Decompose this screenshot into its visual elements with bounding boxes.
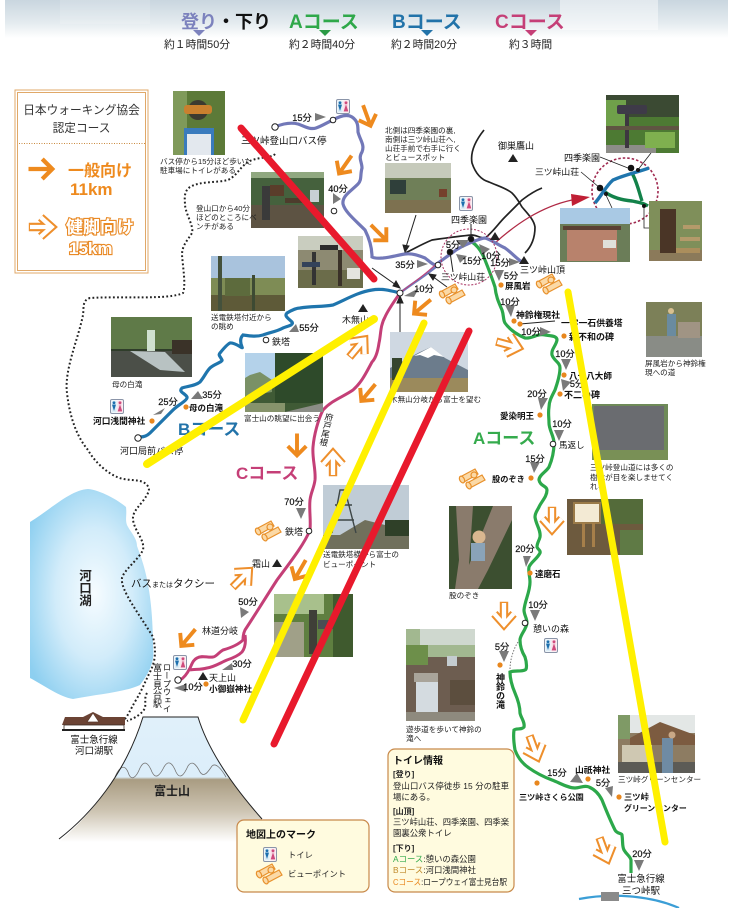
toilet information panel: 園裏公衆トイレ xyxy=(393,828,452,838)
place labels: 三ツ峠登山口バス停 xyxy=(241,135,327,147)
photo: signpost with hedge xyxy=(606,95,679,153)
route: Bコース (blue) xyxy=(140,289,400,437)
orange point dots xyxy=(149,282,622,800)
heading: Bコース: Bコース xyxy=(392,12,462,33)
inset: summit detail map xyxy=(581,153,658,228)
photo captions: 遊歩道を歩いて神鈴の xyxy=(406,724,482,734)
map legend panel xyxy=(237,820,369,892)
place labels: 達磨石 xyxy=(535,569,561,579)
photo: green center xyxy=(618,715,695,773)
place labels: 屏風岩 xyxy=(505,281,531,291)
photo captions: 登山口から40分 xyxy=(196,203,250,213)
place labels: 八十八大師 xyxy=(569,370,612,381)
photo captions: 南側は三ツ峠山荘へ, xyxy=(385,134,455,144)
label: 富士山: 富士山 xyxy=(154,783,190,798)
course labels: Aコース xyxy=(473,429,535,448)
place labels: 不二の碑 xyxy=(564,389,600,400)
toilet information panel: [山頂] xyxy=(393,807,415,816)
place labels: 霜山 xyxy=(252,559,270,569)
thin pink-blue junction section xyxy=(400,265,438,293)
heading: Aコース xyxy=(289,12,359,51)
heading: Aコース: Aコース xyxy=(289,12,359,33)
photo: Fuji from Kinashi xyxy=(390,332,468,392)
photo captions: 股のぞき xyxy=(449,591,479,600)
time labels: 20分 xyxy=(632,849,652,859)
place labels: 愛染明王 xyxy=(500,411,535,421)
place labels: 天上山 xyxy=(209,673,236,683)
photo captions: ビューポイント xyxy=(323,560,376,569)
place labels: 三ツ峠山頂 xyxy=(520,264,565,275)
place labels: 神鈴権現社 xyxy=(516,309,560,320)
time labels: 25分 xyxy=(158,397,178,407)
place labels: グリーンセンター xyxy=(624,803,687,813)
photo captions: 三ツ峠グリーンセンター xyxy=(618,774,701,784)
heading: 登り・下り: 登り・下り xyxy=(181,12,271,32)
toilet information panel: Cコース:ロープウェイ富士見台駅 xyxy=(393,877,508,887)
dotted bus route xyxy=(67,154,275,721)
photo captions: 木無山分岐から富士を望む xyxy=(390,394,481,404)
place labels: 馬返し xyxy=(559,440,585,450)
time labels xyxy=(158,113,652,859)
time labels: 15分 xyxy=(525,454,545,464)
course labels: Bコース xyxy=(178,420,240,439)
photo captions: とビュースポット xyxy=(385,153,445,162)
legend panel: course types xyxy=(15,90,148,273)
place labels: 母の白滝 xyxy=(189,403,224,413)
place labels: 神鈴の滝 xyxy=(495,672,505,710)
time labels: 15分 xyxy=(547,768,567,778)
time labels: 50分 xyxy=(238,597,258,607)
place labels xyxy=(70,135,687,897)
place labels: 三ツ峠 xyxy=(624,792,650,802)
label: 河口湖: 河口湖 xyxy=(77,569,91,607)
toilet icons xyxy=(110,100,558,670)
place labels: 山祇神社 xyxy=(575,764,610,775)
time labels: 10分 xyxy=(481,251,501,261)
time labels: 15分 xyxy=(292,113,312,123)
time labels: 10分 xyxy=(500,297,520,307)
photo captions: 樹木が目を楽しませてく xyxy=(590,472,673,482)
place labels: 富士見台駅 xyxy=(152,662,162,709)
photo captions: 送電鉄塔付近から xyxy=(211,312,272,322)
toilet information panel: Bコース:河口浅間神社 xyxy=(393,865,476,875)
time labels: 10分 xyxy=(414,284,434,294)
photo: steel tower and Fuji xyxy=(323,485,409,549)
time labels: 5分 xyxy=(596,778,610,788)
toilet information panel: 登山口バス停徒歩 15 分の駐車 xyxy=(393,781,509,791)
place labels: 鉄塔 xyxy=(272,336,290,347)
label: strong walkers: 15km xyxy=(69,239,112,258)
time labels: 20分 xyxy=(527,389,547,399)
time labels: 35分 xyxy=(395,260,415,270)
place labels: 四季楽園 xyxy=(564,152,600,163)
map legend panel: トイレ xyxy=(288,850,313,860)
photo: north sign xyxy=(385,163,451,213)
time labels: 5分 xyxy=(570,379,584,389)
lake xyxy=(30,489,153,699)
place labels: バスまたはタクシー xyxy=(131,578,215,590)
time labels: 10分 xyxy=(552,419,572,429)
time labels: 5分 xyxy=(446,240,460,250)
heading: Cコース xyxy=(495,12,565,51)
time labels: 10分 xyxy=(183,682,203,692)
photo captions: 山荘手前で右手に行く xyxy=(385,143,461,153)
photo captions: 送電鉄塔横から富士の xyxy=(323,549,399,559)
heading: Cコース: Cコース xyxy=(495,12,565,33)
heading: Cコース: 約３時間 xyxy=(509,37,552,51)
arrow: general xyxy=(28,159,52,179)
legend panel: course types: 日本ウォーキング協会 xyxy=(23,103,140,117)
photo captions: 三ツ峠登山道には多くの xyxy=(590,462,674,472)
time labels: 55分 xyxy=(299,323,319,333)
label: strong walkers: 健脚向け xyxy=(66,218,134,237)
place labels: 一字一石供養塔 xyxy=(561,317,623,328)
dashed spur path xyxy=(510,642,518,670)
place labels: 親不和の碑 xyxy=(569,331,614,342)
place labels: ロープウェイ xyxy=(162,663,172,713)
photo: first view of Fuji xyxy=(245,353,323,412)
time labels: 20分 xyxy=(515,544,535,554)
toilet information panel: 三ツ峠山荘、四季楽園、四季楽 xyxy=(393,817,510,827)
photo captions xyxy=(112,125,706,784)
callout arrows xyxy=(372,215,555,332)
red link to inset xyxy=(495,194,590,243)
time labels: 10分 xyxy=(528,600,548,610)
photo: bus stop xyxy=(173,91,225,155)
time labels: 30分 xyxy=(232,659,252,669)
photo captions: の眺め xyxy=(211,321,234,331)
place labels: 富士急行線 xyxy=(617,873,665,885)
arrow: strong walkers xyxy=(29,217,52,237)
route nodes xyxy=(135,117,556,683)
photo: arrow signboard xyxy=(567,499,643,555)
photo: toilet hut xyxy=(560,208,630,262)
place labels: 四季楽園 xyxy=(451,214,487,225)
place labels: 三ツ峠山荘 xyxy=(535,166,579,177)
heading: Bコース xyxy=(391,12,462,51)
Mt. Fuji xyxy=(59,717,270,842)
overlay strokes: red xyxy=(241,128,469,744)
road lines xyxy=(405,130,542,253)
photo: 神鈴の滝 waterfall xyxy=(406,629,475,721)
time labels: 15分 xyxy=(462,256,482,266)
binocular viewpoint icons xyxy=(254,274,562,542)
photo captions: 北側は四季楽園の裏, xyxy=(385,125,455,135)
place labels: 御巣鷹山 xyxy=(498,140,534,151)
heading: 登り・下り: 約１時間50分 xyxy=(164,37,230,51)
legend panel: course types: 認定コース xyxy=(53,122,110,135)
photo captions: ンチがある xyxy=(196,221,234,231)
railway line and station xyxy=(579,892,679,908)
time labels: 70分 xyxy=(284,497,304,507)
photo: pylon view xyxy=(211,256,285,311)
time markers xyxy=(153,113,644,871)
map legend panel: 地図上のマーク xyxy=(246,828,316,841)
toilet information panel xyxy=(388,749,514,892)
header: course times xyxy=(164,12,565,51)
overlay strokes: yellow xyxy=(147,292,665,842)
heading: Aコース: 約２時間40分 xyxy=(289,37,355,51)
photo captions: 富士山の眺望に出会う xyxy=(244,413,320,423)
time labels: 35分 xyxy=(202,390,222,400)
photo captions: 現への道 xyxy=(645,367,676,377)
place labels: 憩いの森 xyxy=(533,623,569,634)
toilet information panel: トイレ情報 xyxy=(393,754,443,767)
summit dashed circle xyxy=(441,229,497,285)
icon: toilet xyxy=(264,848,276,862)
photo: child in tree xyxy=(449,506,512,589)
photo captions: 母の白滝 xyxy=(112,379,143,389)
map legend panel: ビューポイント xyxy=(288,869,346,879)
toilet information panel: 場にある。 xyxy=(393,792,435,802)
photo captions: 駐車場にトイレがある xyxy=(160,165,236,175)
route: Cコース (pink) xyxy=(180,293,400,680)
orange walking-direction arrows xyxy=(174,102,616,862)
photo captions: 滝へ xyxy=(406,733,422,743)
place labels: 鉄塔 xyxy=(285,526,303,537)
mountain triangles xyxy=(198,154,529,680)
time labels: 15分 xyxy=(490,258,510,268)
icon: binoculars xyxy=(255,864,282,885)
route: 登り・下り (purple) xyxy=(275,116,522,265)
place labels: 三ツ峠山荘 xyxy=(441,271,485,282)
photo: wooden sign and steps xyxy=(649,201,702,261)
header banner background xyxy=(5,0,728,38)
photo: forest road sign xyxy=(274,594,353,657)
photo: rock path and hiker xyxy=(646,302,702,357)
time labels: 5分 xyxy=(495,642,509,652)
place labels: 河口湖駅 xyxy=(75,745,113,757)
photo: bench xyxy=(251,172,324,228)
photo: stone plaque xyxy=(592,404,668,460)
heading: Bコース: 約２時間20分 xyxy=(391,37,457,51)
time labels: 5分 xyxy=(504,271,518,281)
photo: 母の白滝 stream xyxy=(111,317,192,377)
label: general course: 11km xyxy=(70,180,113,199)
place labels: 三つ峠駅 xyxy=(622,885,660,897)
toilet information panel: Aコース:憩いの森公園 xyxy=(393,854,476,864)
course labels xyxy=(178,420,535,483)
Kawaguchiko station xyxy=(62,712,125,731)
place labels: 河口浅間神社 xyxy=(93,415,145,426)
photo captions: バス停から15分ほど歩いた xyxy=(160,156,252,166)
photo captions: ほどのところにベ xyxy=(196,213,257,222)
time labels: 10分 xyxy=(555,349,575,359)
photo: signposts xyxy=(298,236,363,288)
place labels: 股のぞき xyxy=(492,475,525,484)
heading: 登り・下り xyxy=(164,12,271,51)
place labels: 富士急行線 xyxy=(70,734,118,746)
course labels: Cコース xyxy=(236,464,298,483)
place labels: 小御嶽神社 xyxy=(209,683,252,694)
time labels: 40分 xyxy=(328,184,348,194)
place labels: 林道分岐 xyxy=(202,625,238,636)
time labels: 10分 xyxy=(521,327,541,337)
photo captions: れる xyxy=(590,482,605,491)
toilet information panel: [下り] xyxy=(393,844,415,853)
place labels: 三ツ峠さくら公園 xyxy=(519,792,584,802)
place labels: 府戸尾根 xyxy=(318,412,335,448)
place labels: 河口局前バス停 xyxy=(120,445,183,456)
photo captions: 屏風岩から神鈴権 xyxy=(645,358,706,368)
route: Aコース (green) xyxy=(472,242,631,873)
label: general course: 一般向け xyxy=(68,163,132,180)
place labels: 木無山 xyxy=(342,314,369,325)
toilet information panel: [登り] xyxy=(393,769,415,779)
